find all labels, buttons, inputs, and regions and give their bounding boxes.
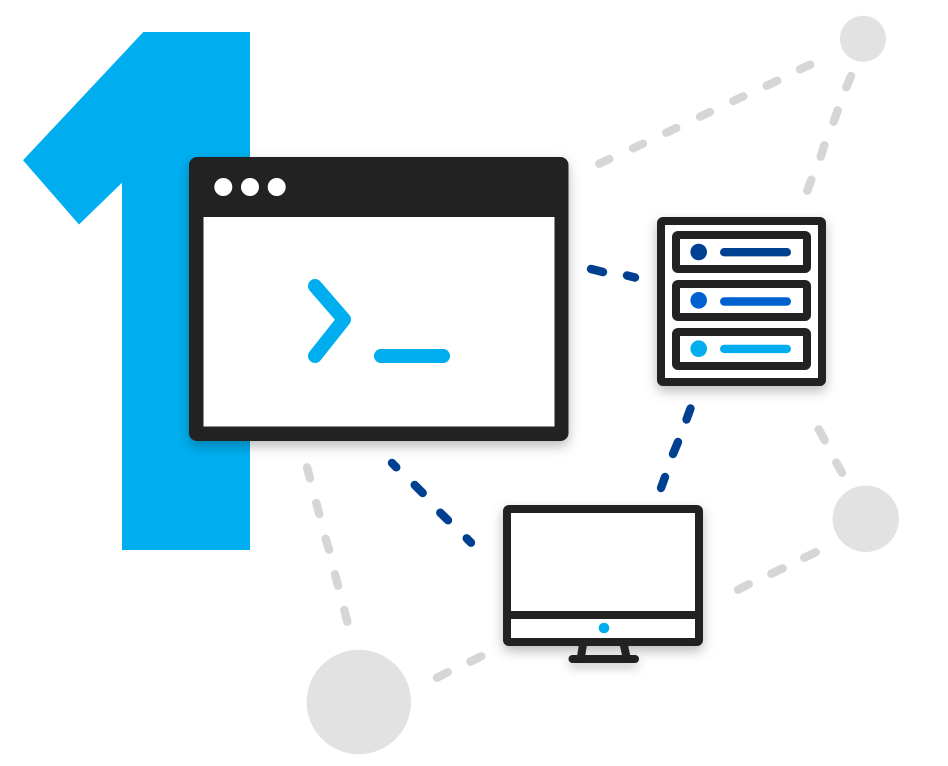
window control dots [214,178,286,196]
big numeral one [23,32,250,550]
server unit two [676,284,807,317]
monitor base [568,655,639,663]
server unit three [676,332,807,366]
monitor power light [599,623,609,633]
terminal prompt icon [315,286,443,356]
window frame [189,157,568,441]
desktop monitor icon [504,509,702,663]
monitor stand [581,641,626,657]
window content area [204,217,554,426]
monitor body [507,509,699,642]
grey dashed connections [307,65,851,678]
monitor chin divider [504,611,702,619]
rack frame [661,221,822,382]
grey network nodes [307,16,899,754]
server rack icon [661,221,822,382]
server unit one [676,235,807,269]
dark blue dashed connections [392,269,690,543]
terminal window [189,157,568,441]
